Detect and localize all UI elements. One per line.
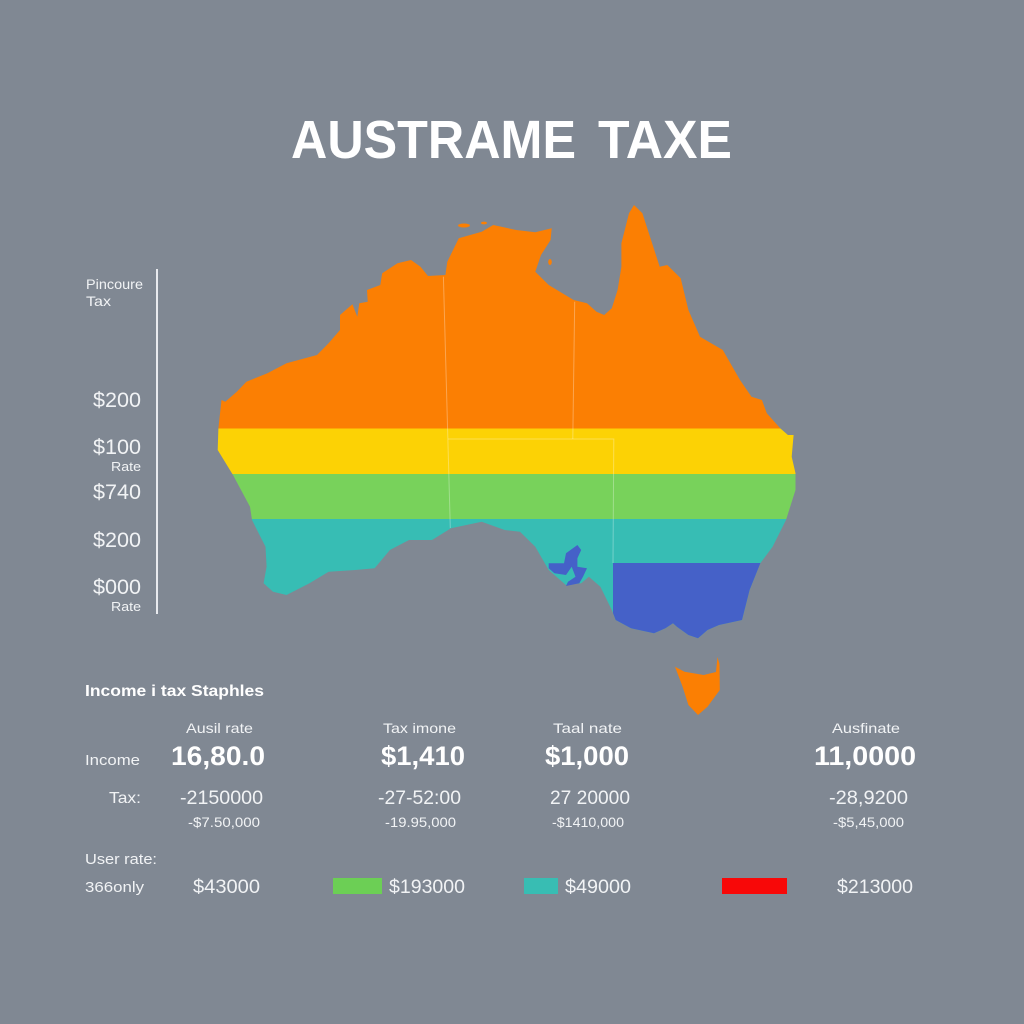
tax row: Tax: bbox=[109, 790, 141, 807]
user rate row: $213000 bbox=[837, 877, 913, 898]
map of Australia bbox=[200, 195, 810, 715]
column headers: Ausfinate bbox=[832, 720, 900, 736]
scale labels: Rate bbox=[111, 599, 141, 614]
scale heading bbox=[86, 276, 143, 309]
gulf detail bbox=[549, 545, 587, 586]
column headers bbox=[186, 720, 900, 736]
scale heading: Pincoure bbox=[86, 276, 143, 292]
panel: income tax table bbox=[85, 683, 916, 898]
tax row: 27 20000 bbox=[550, 788, 630, 809]
tax sub row: -$5,45,000 bbox=[833, 814, 904, 830]
tax row: -28,9200 bbox=[829, 788, 908, 809]
income row: 16,80.0 bbox=[171, 741, 265, 771]
column headers: Ausil rate bbox=[186, 720, 253, 736]
column headers: Tax imone bbox=[383, 720, 456, 736]
scale labels: $740 bbox=[93, 481, 141, 504]
user rate row: 366only bbox=[85, 879, 145, 896]
scale labels: $200 bbox=[93, 529, 141, 552]
income row bbox=[85, 741, 916, 771]
tax sub row: -$1410,000 bbox=[552, 814, 624, 830]
scale labels: $200 bbox=[93, 389, 141, 412]
tax row: -2150000 bbox=[180, 788, 263, 809]
state borders bbox=[443, 277, 614, 563]
user rate row bbox=[85, 877, 913, 898]
tax sub row: -19.95,000 bbox=[385, 814, 456, 830]
table heading: Income i tax Staphles bbox=[85, 683, 264, 700]
user rate row: $193000 bbox=[389, 877, 465, 898]
title: AUSTRAME bbox=[291, 110, 576, 170]
Tasmania bbox=[675, 657, 720, 715]
tax row: -27-52:00 bbox=[378, 788, 461, 809]
income row: $1,000 bbox=[545, 741, 629, 771]
title: TAXE bbox=[598, 110, 732, 170]
income row: 11,0000 bbox=[814, 741, 916, 771]
scale heading: Tax bbox=[86, 293, 111, 309]
scale labels bbox=[93, 389, 141, 614]
panel: vertical scale bbox=[86, 269, 158, 614]
tax sub row: -$7.50,000 bbox=[188, 814, 260, 830]
scale axis line bbox=[156, 269, 158, 614]
tax row bbox=[109, 788, 908, 809]
income row: $1,410 bbox=[381, 741, 465, 771]
scale labels: Rate bbox=[111, 459, 141, 474]
scale labels: $100 bbox=[93, 436, 141, 459]
user rate row: $43000 bbox=[193, 877, 260, 898]
northern islands bbox=[458, 222, 552, 265]
user rate label: User rate: bbox=[85, 851, 157, 868]
mainland colour bands bbox=[200, 195, 810, 649]
scale labels: $000 bbox=[93, 576, 141, 599]
income row: Income bbox=[85, 752, 140, 769]
user rate row: $49000 bbox=[565, 877, 631, 898]
tax sub row bbox=[188, 814, 904, 830]
column headers: Taal nate bbox=[553, 720, 622, 736]
title bbox=[291, 110, 732, 170]
